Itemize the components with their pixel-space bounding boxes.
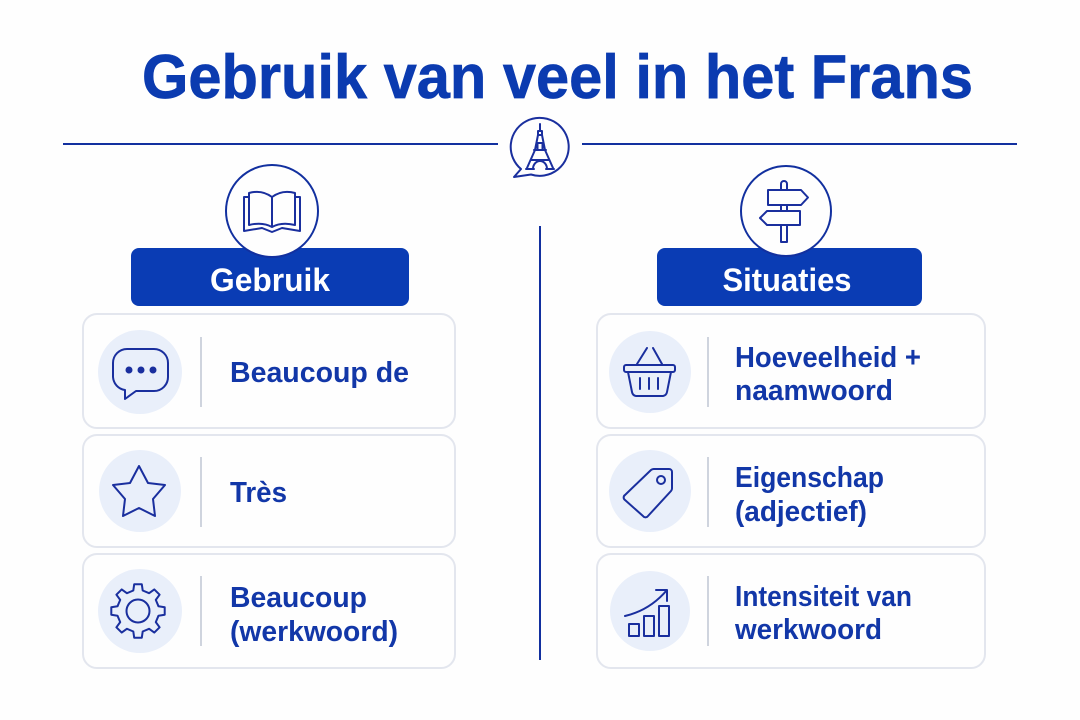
vertical divider	[539, 226, 541, 660]
icon: chat bubble	[113, 349, 168, 399]
card: Très: Très	[230, 477, 287, 509]
card: Beaucoup de	[83, 314, 455, 428]
card: Eigenschap (adjectief): (adjectief)	[735, 496, 867, 528]
heading: Situaties: Situaties	[722, 262, 852, 298]
heading: Situaties	[657, 166, 922, 306]
card: Très	[83, 435, 455, 547]
icon: gear	[111, 584, 165, 638]
icon: basket	[624, 348, 675, 396]
icon: rising chart	[625, 590, 669, 636]
icon: Eiffel tower speech bubble	[511, 118, 569, 177]
card: Beaucoup de: Beaucoup de	[230, 357, 409, 389]
icon: star	[113, 466, 165, 516]
card: Hoeveelheid + naamwoord: naamwoord	[735, 375, 893, 407]
icon: price tag	[624, 469, 672, 517]
card: Beaucoup (werkwoord): Beaucoup	[230, 582, 367, 614]
card: Hoeveelheid + naamwoord: Hoeveelheid +	[735, 342, 921, 374]
panel: Situaties	[597, 166, 985, 668]
card: Beaucoup (werkwoord): (werkwoord)	[230, 616, 398, 648]
heading: Gebruik: Gebruik	[210, 262, 330, 298]
title: Gebruik van veel in het Frans	[142, 43, 973, 112]
card: Hoeveelheid + naamwoord	[597, 314, 985, 428]
icon: open book	[244, 192, 300, 232]
card: Intensiteit van werkwoord: Intensiteit van	[735, 581, 912, 613]
card: Intensiteit van werkwoord: werkwoord	[734, 614, 882, 646]
panel: Gebruik	[83, 165, 455, 668]
card: Eigenschap (adjectief)	[597, 435, 985, 547]
card: Beaucoup (werkwoord)	[83, 554, 455, 668]
card: Intensiteit van werkwoord	[597, 554, 985, 668]
card: Eigenschap (adjectief): Eigenschap	[735, 462, 884, 494]
heading: Gebruik	[131, 165, 409, 306]
icon: signpost	[760, 181, 808, 242]
